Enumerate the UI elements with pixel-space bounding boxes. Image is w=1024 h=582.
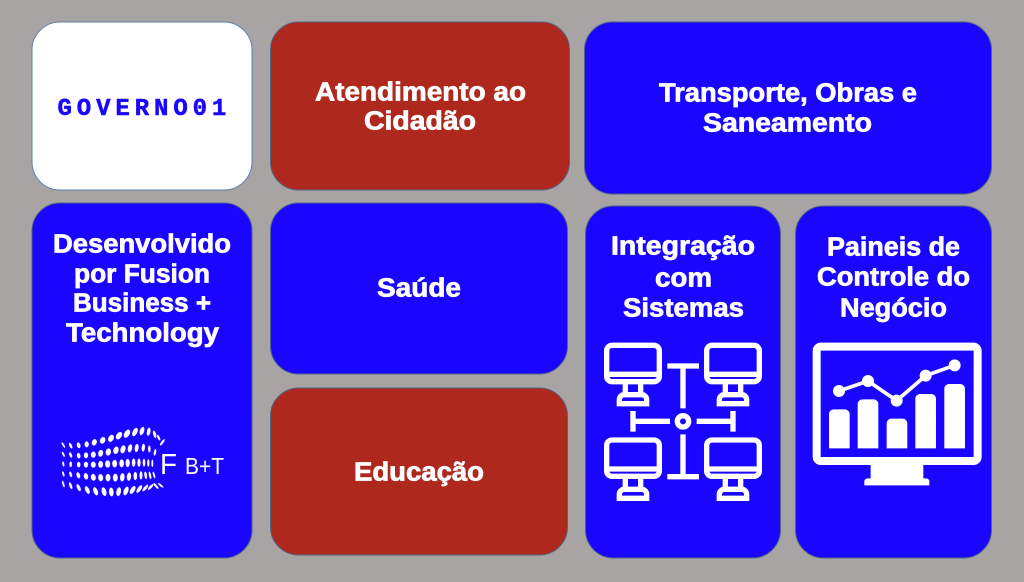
icon: networked computers: [607, 345, 759, 498]
panel: Painéis de Controle do Negócio: [796, 206, 992, 558]
heading: Atendimento ao Cidadão: Cidadão: [364, 108, 476, 136]
heading: Educação: Educação: [354, 458, 484, 486]
heading: Paineis de Controle do Negócio: Paineis de: [827, 234, 960, 262]
heading: Integração com Sistemas: com: [655, 264, 712, 292]
panel: Integração com Sistemas: [586, 206, 780, 558]
panel: Desenvolvido por Fusion Business + Technology: [32, 203, 252, 558]
heading: Integração com Sistemas: Sistemas: [623, 294, 744, 322]
heading: Desenvolvido por Fusion Business + Technology: Technology: [66, 320, 220, 348]
panel: Atendimento ao Cidadão: [270, 22, 570, 190]
heading: Desenvolvido por Fusion Business + Technology: Desenvolvido: [53, 230, 231, 258]
icon: dashboard monitor with chart: [817, 347, 978, 485]
icon: Fusion B+T logo: F: [160, 449, 177, 481]
panel: Saúde: [270, 203, 568, 374]
icon: Fusion B+T logo: [61, 426, 224, 496]
heading: Transporte, Obras e Saneamento: Transporte, Obras e: [659, 80, 917, 108]
heading: Transporte, Obras e Saneamento: Saneamento: [703, 110, 872, 138]
heading: Saúde: Saúde: [377, 274, 461, 302]
heading: Desenvolvido por Fusion Business + Technology: Business +: [73, 290, 211, 318]
icon: Fusion B+T logo: B+T: [185, 453, 224, 479]
heading: Paineis de Controle do Negócio: Controle do: [817, 264, 970, 292]
heading: Atendimento ao Cidadão: Atendimento ao: [315, 78, 526, 106]
panel: Transporte, Obras e Saneamento: [584, 22, 992, 194]
panel: Educação: [270, 388, 568, 555]
logo text: GOVERNO01: [58, 96, 231, 123]
heading: Paineis de Controle do Negócio: Negócio: [840, 294, 947, 322]
heading: Integração com Sistemas: Integração: [611, 232, 755, 260]
panel: GOVERNO01 logo: [32, 22, 252, 190]
heading: Desenvolvido por Fusion Business + Technology: por Fusion: [74, 260, 210, 288]
